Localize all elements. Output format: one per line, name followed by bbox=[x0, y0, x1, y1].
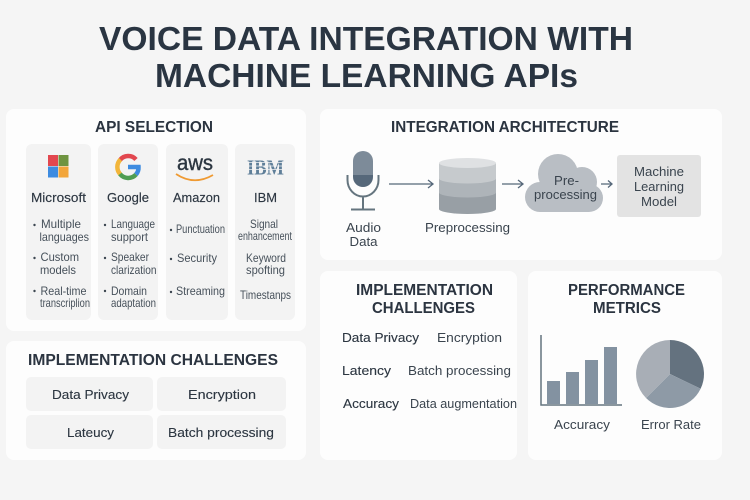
feature list: Microsoft: models bbox=[40, 263, 76, 277]
feature list: Google bbox=[104, 217, 156, 310]
heading: API selection: API SELECTION bbox=[95, 119, 213, 136]
row: data privacy and encryption: Data Privacy bbox=[342, 330, 420, 345]
feature list: Google: adaptation bbox=[111, 296, 156, 310]
feature list: Google: Speaker bbox=[111, 250, 149, 264]
box: machine learning model: Machine bbox=[634, 164, 684, 179]
feature list: Amazon bbox=[170, 222, 225, 298]
row: latency and batch processing bbox=[342, 363, 511, 378]
feature list: Microsoft: languages bbox=[40, 230, 89, 244]
panel: integration architecture bbox=[320, 109, 722, 260]
feature list: IBM: spofting bbox=[246, 263, 285, 277]
feature list: IBM: Timestanps bbox=[240, 288, 291, 302]
heading: implementation challenges bbox=[356, 282, 493, 317]
box: machine learning model: Learning bbox=[634, 179, 684, 194]
heading: implementation challenges: IMPLEMENTATION bbox=[356, 282, 493, 299]
label: Microsoft: Microsoft bbox=[31, 190, 86, 205]
feature list: IBM bbox=[238, 217, 292, 302]
arrow: audio to preprocessing bbox=[389, 180, 433, 188]
feature list: Amazon: Security bbox=[177, 251, 217, 265]
feature list: Google: Language bbox=[111, 217, 155, 231]
feature list: IBM: Keyword bbox=[246, 251, 286, 265]
icon: IBM logo: IBM bbox=[247, 156, 284, 180]
row: accuracy and data augmentation bbox=[343, 396, 517, 411]
icon: Microsoft logo bbox=[48, 155, 68, 178]
label: Audio Data: Audio bbox=[346, 220, 381, 235]
label: Google: Google bbox=[107, 190, 149, 205]
feature list: Amazon: Punctuation bbox=[176, 222, 225, 236]
row: accuracy and data augmentation: Accuracy bbox=[343, 396, 400, 411]
panel: implementation challenges (right) bbox=[320, 271, 517, 460]
cell: Lateucy: Lateucy bbox=[67, 425, 115, 440]
icon: database cylinder bbox=[439, 158, 496, 214]
card: Amazon bbox=[166, 144, 228, 320]
label: Accuracy: Accuracy bbox=[554, 417, 611, 432]
panel: performance metrics bbox=[528, 271, 722, 460]
cell: Batch processing bbox=[157, 415, 286, 449]
title: MACHINE LEARNING APIs bbox=[155, 57, 578, 94]
heading: performance metrics: METRICS bbox=[593, 300, 661, 317]
icon: Google logo bbox=[117, 156, 139, 178]
icon: AWS logo: aws bbox=[177, 152, 213, 175]
label: Error Rate: Error Rate bbox=[641, 417, 701, 432]
arrow: cloud to model bbox=[601, 180, 612, 188]
panel: API selection bbox=[6, 109, 306, 331]
feature list: IBM: enhancement bbox=[238, 229, 292, 243]
label: Preprocessing: Preprocessing bbox=[425, 220, 510, 235]
card: IBM bbox=[235, 144, 295, 320]
feature list: Google: support bbox=[111, 230, 149, 244]
label: Audio Data bbox=[346, 220, 381, 249]
cell: Batch processing: Batch processing bbox=[168, 425, 274, 440]
feature list: Microsoft: Real-time bbox=[40, 284, 87, 298]
row: accuracy and data augmentation: Data augmentation bbox=[410, 396, 517, 411]
cell: Encryption bbox=[157, 377, 286, 411]
feature list: Google: Domain bbox=[111, 284, 147, 298]
arrow: preprocessing to cloud bbox=[502, 180, 523, 188]
feature list: Google: clarization bbox=[111, 263, 156, 277]
feature list: Microsoft: transcriplion bbox=[40, 296, 90, 310]
pie chart: error rate bbox=[636, 340, 704, 408]
row: data privacy and encryption: Encryption bbox=[437, 330, 502, 345]
title bbox=[99, 20, 633, 94]
heading: performance metrics bbox=[568, 282, 685, 317]
panel: implementation challenges (left) bbox=[6, 341, 306, 460]
row: data privacy and encryption bbox=[342, 330, 502, 345]
feature list: Microsoft: Multiple bbox=[41, 217, 81, 231]
bar chart: accuracy bbox=[541, 335, 622, 405]
cell: Lateucy bbox=[26, 415, 153, 449]
cell: Data Privacy: Data Privacy bbox=[52, 387, 130, 402]
feature list: Amazon: Streaming bbox=[176, 284, 225, 298]
heading: performance metrics: PERFORMANCE bbox=[568, 282, 685, 299]
icon: cloud with label bbox=[525, 154, 603, 212]
row: latency and batch processing: Batch processing bbox=[408, 363, 511, 378]
title: VOICE DATA INTEGRATION WITH bbox=[99, 20, 633, 57]
card: Google bbox=[98, 144, 158, 320]
heading: integration architecture: INTEGRATION ARCHITECTURE bbox=[391, 119, 619, 136]
icon: microphone bbox=[348, 151, 378, 210]
icon: cloud with label: Pre- bbox=[554, 173, 579, 188]
box: machine learning model: Model bbox=[641, 194, 677, 209]
label: IBM: IBM bbox=[254, 190, 277, 205]
heading: implementation challenges: CHALLENGES bbox=[372, 300, 475, 317]
box: machine learning model bbox=[617, 155, 701, 217]
label: Audio Data: Data bbox=[350, 234, 378, 249]
icon: cloud with label: processing bbox=[534, 187, 597, 202]
label: Amazon: Amazon bbox=[173, 190, 220, 205]
feature list: IBM: Signal bbox=[250, 217, 278, 231]
feature list: Microsoft: Custom bbox=[40, 250, 79, 264]
row: latency and batch processing: Latency bbox=[342, 363, 392, 378]
card: Microsoft bbox=[26, 144, 91, 320]
cell: Encryption: Encryption bbox=[188, 387, 256, 402]
feature list: Microsoft bbox=[33, 217, 90, 310]
heading: implementation challenges: IMPLEMENTATION CHALLENGES bbox=[28, 352, 278, 369]
cell: Data Privacy bbox=[26, 377, 153, 411]
